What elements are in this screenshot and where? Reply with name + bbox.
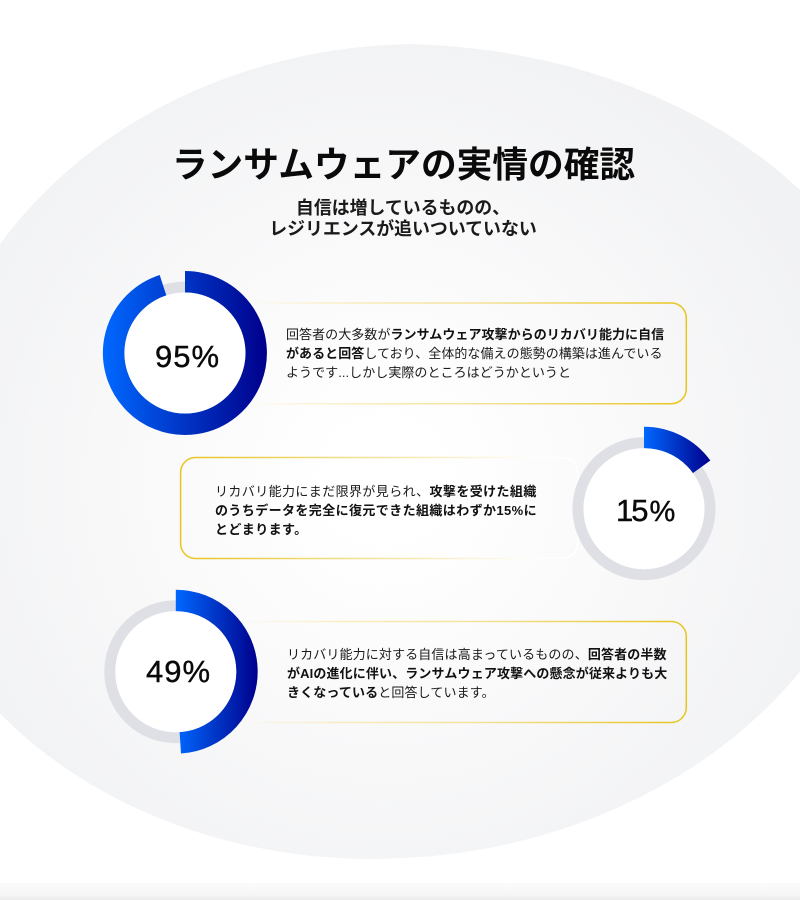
text box outline <box>200 622 686 722</box>
description text: 回答者の大多数がランサムウェア攻撃からのリカバリ能力に自信 <box>286 327 664 342</box>
subtitle: 自信は増しているものの、 <box>296 198 510 218</box>
description text: と回答しています。 <box>378 685 495 700</box>
value: 95%: 95% <box>155 339 220 374</box>
subtitle: レジリエンスが追いついていない <box>269 218 537 239</box>
description text: がAIの進化に伴い、ランサムウェア攻撃への懸念が従来よりも大 <box>287 666 667 681</box>
title: ランサムウェアの実情の確認 <box>172 145 635 185</box>
description text: リカバリ能力にまだ限界が見られ、攻撃を受けた組織 <box>215 484 537 499</box>
donut chart: 15% <box>578 437 710 575</box>
panel: 15% <box>180 426 716 580</box>
description text: とどまります。 <box>215 522 308 537</box>
description text: ようです...しかし実際のところはどうかというと <box>286 365 571 380</box>
panel: 95% <box>102 271 688 435</box>
donut chart: 95% <box>114 282 256 424</box>
text box outline <box>200 303 686 404</box>
value: 49%: 49% <box>146 654 211 689</box>
text box outline <box>181 458 578 558</box>
description text: しており、全体的な備えの態勢の構築は進んでいる <box>364 346 663 361</box>
subtitle <box>269 198 537 239</box>
description text: があると回答 <box>286 346 364 361</box>
description text: のうちデータを完全に復元できた組織はわずか15%に <box>215 503 537 518</box>
donut chart: 49% <box>110 600 247 743</box>
value: 15%: 15% <box>616 493 676 528</box>
description text: リカバリ能力に対する自信は高まっているものの、回答者の半数 <box>287 647 667 662</box>
panel: 49% <box>104 590 688 754</box>
description text: きくなっている <box>287 685 378 700</box>
